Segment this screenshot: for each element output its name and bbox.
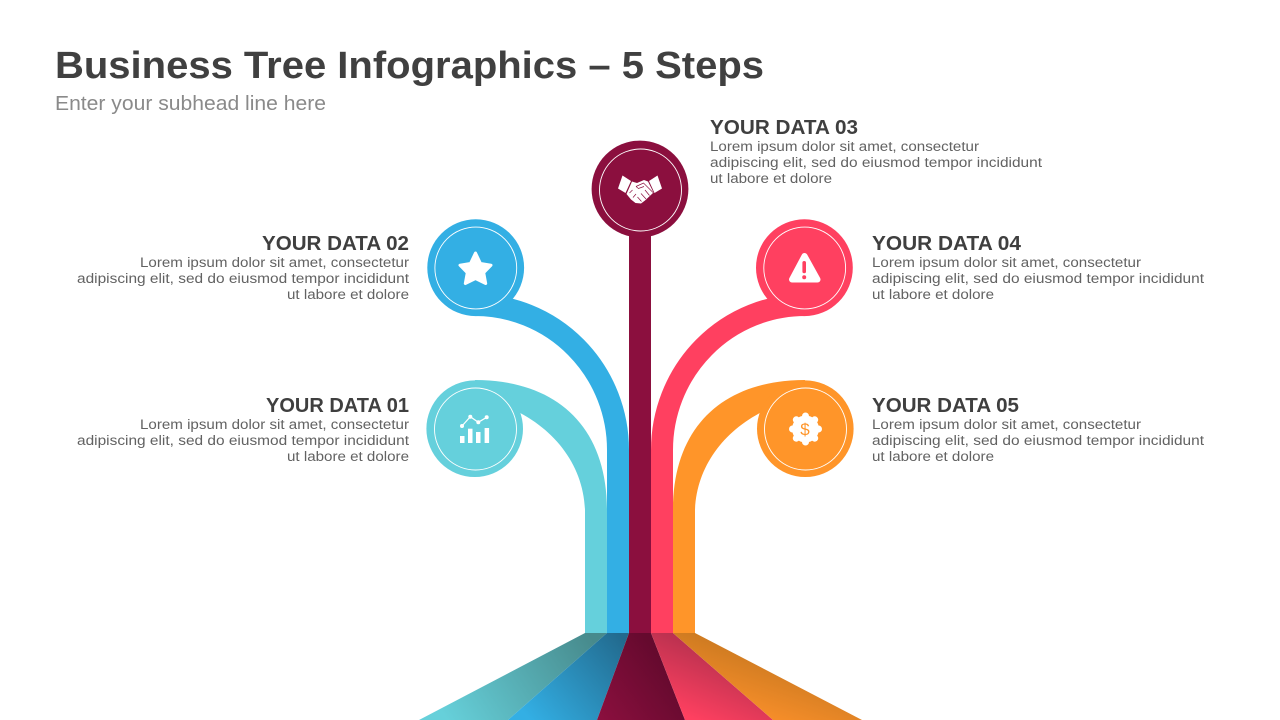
- text block: your data 03: YOUR DATA 03: [710, 117, 858, 139]
- text block: your data 03: [710, 117, 1042, 186]
- branch 01: teal stem: [475, 380, 607, 633]
- text block: your data 05: ut labore et dolore: [872, 449, 994, 464]
- text block: your data 04: adipiscing elit, sed do eiusmod tempor incididunt: [872, 271, 1204, 286]
- text block: your data 02: YOUR DATA 02: [262, 233, 409, 255]
- branch 02: blue stem: [475, 305, 618, 633]
- node 04: red circle with warning icon: [756, 219, 853, 316]
- text block: your data 03: ut labore et dolore: [710, 171, 832, 186]
- text block: your data 05: adipiscing elit, sed do eiusmod tempor incididunt: [872, 433, 1204, 448]
- icon: bar chart with trend line: [460, 415, 489, 443]
- floor perspective base: [419, 633, 862, 720]
- title: Business Tree Infographics – 5 Steps: [55, 45, 764, 87]
- text block: your data 04: [872, 233, 1204, 302]
- icon: warning triangle: [792, 256, 818, 280]
- text block: your data 02: Lorem ipsum dolor sit amet, consectetur: [140, 255, 410, 270]
- text block: your data 01: [77, 395, 410, 464]
- node 02: blue circle with star icon: [427, 219, 524, 316]
- text block: your data 01: Lorem ipsum dolor sit amet, consectetur: [140, 417, 410, 432]
- text block: your data 03: Lorem ipsum dolor sit amet, consectetur: [710, 139, 980, 154]
- text block: your data 03: adipiscing elit, sed do eiusmod tempor incididunt: [710, 155, 1042, 170]
- text block: your data 05: Lorem ipsum dolor sit amet, consectetur: [872, 417, 1142, 432]
- text block: your data 04: YOUR DATA 04: [872, 233, 1022, 255]
- text block: your data 04: Lorem ipsum dolor sit amet, consectetur: [872, 255, 1142, 270]
- icon: handshake: [618, 176, 662, 204]
- text block: your data 01: ut labore et dolore: [287, 449, 409, 464]
- icon: star: [460, 253, 491, 284]
- node 01: teal circle with chart icon: [426, 380, 523, 477]
- branch 05: orange stem: [673, 380, 805, 633]
- text block: your data 05: [872, 395, 1204, 464]
- node 05: orange circle with gear dollar icon: [757, 380, 854, 477]
- text block: your data 04: ut labore et dolore: [872, 287, 994, 302]
- text block: your data 01: adipiscing elit, sed do eiusmod tempor incididunt: [77, 433, 409, 448]
- branch 04: red stem: [662, 305, 805, 633]
- node 03: maroon circle with handshake icon: [592, 141, 688, 237]
- text block: your data 02: ut labore et dolore: [287, 287, 409, 302]
- text block: your data 02: [77, 233, 410, 302]
- subtitle: Enter your subhead line here: [55, 93, 326, 115]
- text block: your data 01: YOUR DATA 01: [266, 395, 409, 417]
- text block: your data 02: adipiscing elit, sed do eiusmod tempor incididunt: [77, 271, 409, 286]
- branch 03: maroon stem: [629, 230, 651, 633]
- text block: your data 05: YOUR DATA 05: [872, 395, 1019, 417]
- icon: gear with dollar: $: [800, 420, 810, 439]
